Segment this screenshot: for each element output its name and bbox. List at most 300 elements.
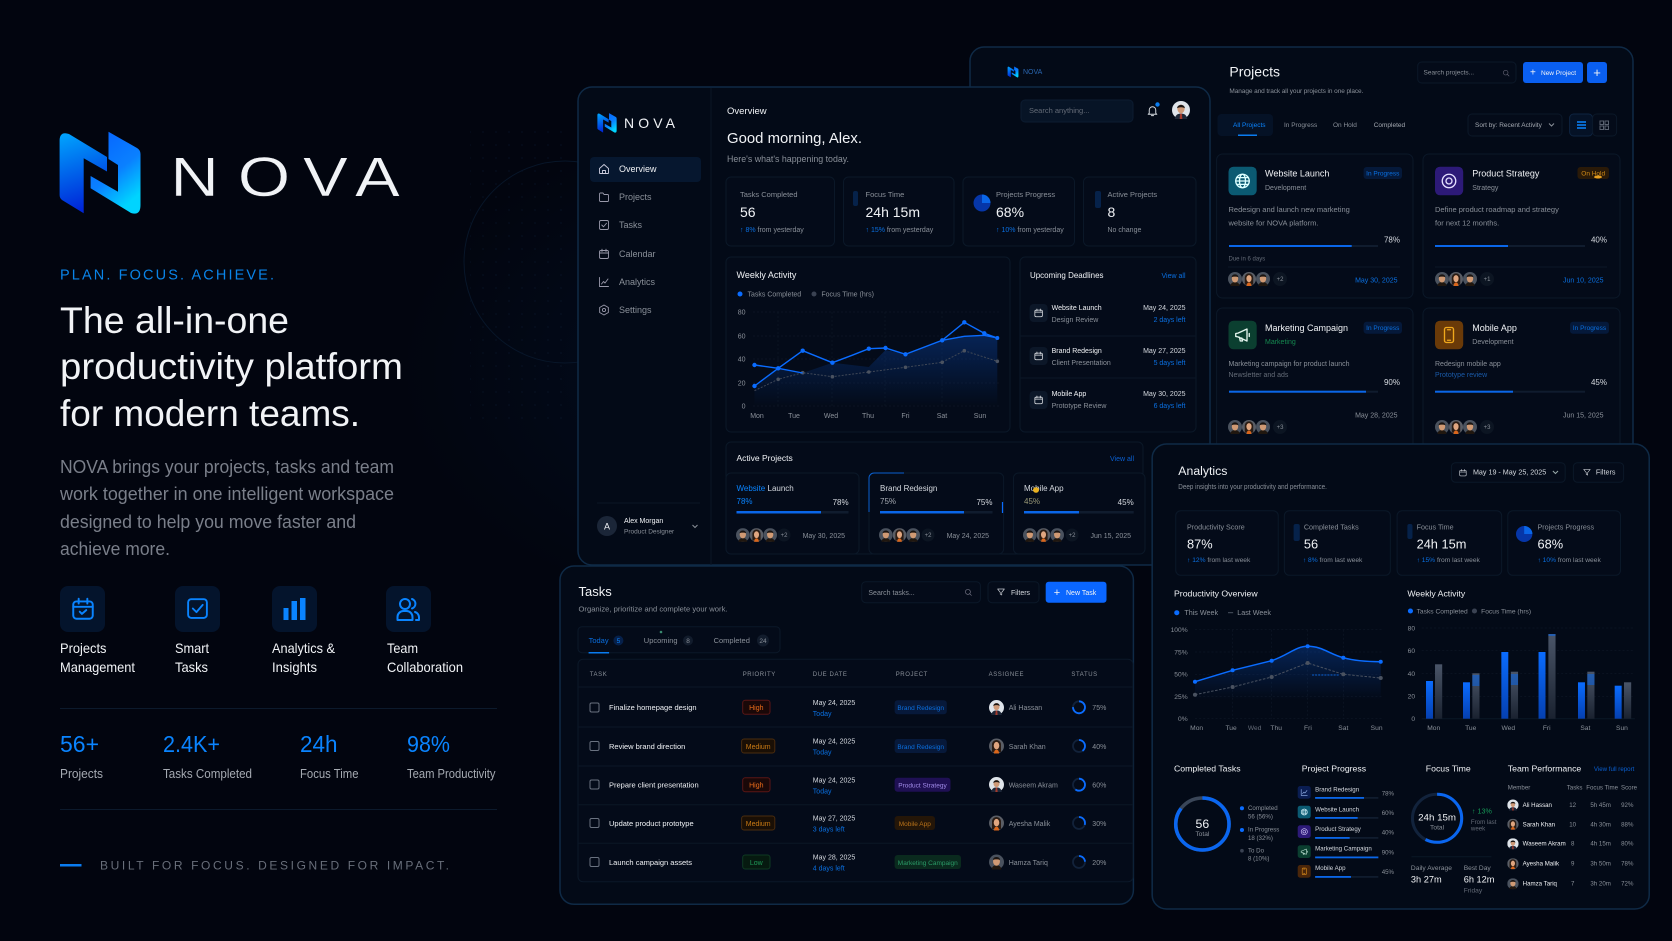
feature icons row [60, 586, 463, 675]
stat card: productivity score: ↑ 12% from last week [1187, 557, 1251, 564]
task row: update product prototype: Mobile App [899, 821, 931, 828]
member row: ali hassan: 5h 45m [1590, 803, 1611, 809]
member row: sarah khan: 4h 30m [1590, 822, 1611, 828]
table header: STATUS [1071, 672, 1098, 678]
navigation menu: Projects [619, 192, 652, 202]
chart: weekly activity line chart: 40 [738, 356, 746, 364]
panel: active projects [726, 442, 1145, 554]
panel: analytics window [1152, 444, 1649, 909]
project tabs: In Progress [1284, 122, 1318, 129]
stat card: focus time [844, 177, 954, 246]
member row: waseem akram [1507, 838, 1634, 849]
stat: team productivity [407, 731, 496, 781]
stat: team productivity: 98% [407, 731, 450, 757]
chart: productivity overview line chart: 75% [1174, 649, 1188, 656]
active project: website launch: May 30, 2025 [803, 533, 845, 540]
sidebar [590, 113, 701, 536]
task tabs: Today [589, 636, 609, 645]
chart: weekly activity line chart: 20 [738, 380, 746, 388]
panel: completed tasks donut: 56 (56%) [1248, 815, 1273, 821]
member row: hamza tariq: Hamza Tariq [1523, 882, 1557, 888]
deadline: website launch: May 24, 2025 [1143, 305, 1186, 312]
task row: review brand direction: 40% [1092, 744, 1106, 751]
stat card: productivity score: 87% [1187, 538, 1213, 552]
task row: launch campaign assets: 20% [1092, 860, 1106, 867]
analytics header: Analytics [1178, 464, 1227, 478]
feature: team collaboration [386, 586, 463, 675]
analytics header [1178, 464, 1327, 491]
project card: website launch: Website Launch [1265, 169, 1329, 179]
project card: marketing campaign: Marketing [1265, 339, 1296, 346]
headline: The all-in-one [60, 300, 289, 341]
panel: focus time ring: ↑ 13% [1472, 807, 1493, 815]
feature: analytics and insights: Analytics & [272, 640, 336, 656]
task row: review brand direction: Brand Redesign [897, 744, 944, 751]
deadline: website launch: 2 days left [1154, 317, 1186, 324]
chart: weekly activity bar chart [1407, 589, 1635, 732]
decorative background glow and dot grid [400, 120, 1160, 620]
task row: prepare client presentation [590, 777, 1106, 796]
member row: ayesha malik: 78% [1621, 862, 1634, 868]
stat: projects: Projects [60, 766, 103, 781]
user profile: A [604, 522, 610, 532]
member row: sarah khan: 10 [1569, 822, 1577, 828]
chart: weekly activity line chart: 60 [738, 334, 746, 340]
stat: focus time: 24h [300, 731, 338, 757]
user profile [597, 516, 698, 536]
panel: focus time ring: 3h 27m [1411, 875, 1442, 885]
task row: finalize homepage design: May 24, 2025 [813, 700, 855, 707]
project tabs: On Hold [1333, 122, 1357, 129]
active project: website launch: 78% [736, 497, 753, 506]
stat card: productivity score [1176, 511, 1278, 575]
project card: marketing campaign: 90% [1384, 378, 1400, 387]
stat card: projects progress: ↑ 10% from last week [1538, 557, 1602, 564]
panel: completed tasks donut: 18 (32%) [1248, 836, 1273, 842]
project card: marketing campaign: +3 [1277, 425, 1284, 431]
projects header: Projects [1229, 64, 1280, 80]
tasks toolbar [862, 582, 1106, 603]
project card: marketing campaign: Marketing campaign for product launch [1228, 361, 1350, 368]
mini logo [597, 113, 676, 133]
task tabs: Upcoming [644, 636, 678, 645]
feature: smart tasks: Smart [175, 640, 209, 656]
deadline: mobile app: 6 days left [1154, 403, 1186, 410]
overview header: Good morning, Alex. [727, 130, 862, 147]
chart: weekly activity bar chart: Tasks Completed [1417, 608, 1468, 615]
chart: weekly activity bar chart: 80 [1408, 625, 1415, 632]
task row: prepare client presentation: 60% [1092, 782, 1106, 790]
project card: mobile app: +3 [1484, 425, 1491, 431]
chart: weekly activity line chart: Thu [862, 413, 874, 420]
project card: product strategy: Define product roadmap and strategy [1435, 205, 1559, 214]
panel: focus time ring: week [1470, 827, 1486, 832]
chart: weekly activity line chart [726, 257, 1010, 432]
project card: product strategy: Jun 10, 2025 [1563, 278, 1604, 285]
chart: weekly activity line chart: Focus Time (hrs) [821, 292, 874, 298]
task row: finalize homepage design: High [749, 705, 764, 712]
task row: launch campaign assets: Marketing Campaign [898, 860, 958, 867]
progress row: brand redesign: Brand Redesign [1315, 788, 1359, 794]
stat card: focus time: 24h 15m [1417, 538, 1466, 552]
progress row: marketing campaign [1298, 845, 1395, 858]
chart: weekly activity bar chart: 20 [1408, 694, 1415, 701]
task row: prepare client presentation: High [749, 782, 764, 790]
panel: focus time ring: Best Day [1464, 865, 1491, 872]
task row: launch campaign assets [590, 854, 1106, 873]
panel: active projects: View all [1110, 456, 1134, 463]
chart: weekly activity line chart: Tasks Completed [748, 292, 801, 298]
member row: ayesha malik: Ayesha Malik [1523, 862, 1560, 868]
mini logo: NOVA [1023, 69, 1043, 76]
tasks table [578, 659, 1133, 882]
active project: brand redesign: 75% [976, 498, 992, 507]
project card: website launch: In Progress [1366, 170, 1400, 178]
active project: mobile app: 45% [1118, 498, 1134, 507]
stat card: active projects: 8 [1108, 204, 1116, 220]
user profile: Alex Morgan [624, 518, 663, 525]
chart: weekly activity bar chart: Weekly Activity [1407, 589, 1466, 599]
tasks header [578, 584, 728, 614]
chart: weekly activity line chart: 80 [738, 310, 746, 316]
progress row: marketing campaign: 90% [1382, 851, 1395, 856]
navigation menu: Analytics [619, 277, 656, 287]
project card: product strategy: On Hold [1581, 170, 1606, 178]
panel: completed tasks donut: 56 [1196, 817, 1209, 831]
headline [60, 300, 403, 434]
stat: tasks completed: Tasks Completed [163, 766, 252, 781]
chart: productivity overview line chart: This Week [1184, 609, 1219, 617]
progress row: website launch: Website Launch [1315, 808, 1359, 813]
project card: website launch: website for NOVA platform. [1228, 218, 1318, 227]
table header: TASK [590, 672, 607, 678]
deadline: brand redesign: May 27, 2025 [1143, 348, 1186, 355]
user profile: Product Designer [624, 529, 675, 536]
stat card: completed tasks [1284, 511, 1390, 575]
task row: prepare client presentation: Waseem Akram [1009, 782, 1058, 790]
overview header: Overview [727, 106, 767, 117]
project card: mobile app: Development [1472, 339, 1514, 346]
panel: focus time ring: From last [1471, 820, 1497, 826]
chart: productivity overview line chart: Fri [1304, 725, 1312, 732]
project card: product strategy: 40% [1591, 236, 1607, 245]
description paragraph: achieve more. [60, 539, 170, 559]
task row: launch campaign assets: 4 days left [813, 866, 845, 873]
projects header [1229, 64, 1364, 95]
chart: productivity overview line chart: Wed [1248, 725, 1262, 732]
feature: analytics and insights [272, 586, 336, 675]
deadline: brand redesign: Client Presentation [1052, 360, 1111, 367]
progress row: product strategy: 40% [1382, 831, 1395, 837]
project card: mobile app: Mobile App [1472, 323, 1517, 333]
active project: mobile app: 45% [1024, 497, 1040, 506]
stat: focus time [300, 731, 358, 781]
stat card: completed tasks: ↑ 8% from last week [1303, 557, 1363, 564]
progress row: marketing campaign: Marketing Campaign [1315, 847, 1372, 852]
deadline: mobile app: May 30, 2025 [1143, 391, 1186, 398]
project card: marketing campaign: May 28, 2025 [1355, 413, 1398, 420]
panel: completed tasks donut: Completed [1248, 806, 1278, 812]
chart: weekly activity bar chart: Tue [1465, 725, 1477, 732]
deadline: mobile app: Prototype Review [1052, 403, 1107, 410]
stat: focus time: Focus Time [300, 766, 358, 781]
tasks header: Organize, prioritize and complete your work. [578, 605, 728, 614]
left column: brand and intro [59, 132, 403, 559]
stat card: active projects: Active Projects [1108, 190, 1157, 199]
tasks toolbar: Filters [1011, 590, 1031, 597]
project card: marketing campaign: Newsletter and ads [1228, 372, 1289, 379]
stat card: projects progress [1508, 511, 1621, 575]
stat: projects: 56+ [60, 731, 99, 757]
panel: focus time ring: Daily Average [1411, 865, 1452, 872]
active project: website launch [726, 473, 859, 554]
task row: update product prototype: 30% [1092, 821, 1106, 828]
chart: productivity overview line chart: 100% [1171, 627, 1188, 634]
chart: weekly activity bar chart: Fri [1543, 725, 1551, 732]
feature: projects management [60, 586, 135, 675]
projects toolbar [1418, 62, 1607, 83]
member row: ali hassan: Ali Hassan [1523, 803, 1552, 809]
task row: finalize homepage design: 75% [1092, 705, 1106, 712]
project card: mobile app: Redesign mobile app [1435, 361, 1501, 368]
navigation menu [590, 157, 701, 315]
deadline: brand redesign [1030, 347, 1186, 367]
table header: ASSIGNEE [989, 672, 1024, 678]
task tabs: 5 [617, 638, 621, 645]
feature: team collaboration: Collaboration [387, 659, 463, 675]
stat card: focus time [1397, 511, 1502, 575]
progress row: mobile app: Mobile App [1315, 866, 1346, 872]
table header: PRIORITY [743, 672, 776, 678]
chart: weekly activity line chart: Wed [824, 413, 838, 420]
mini logo [1008, 66, 1043, 77]
stat card: active projects: No change [1108, 227, 1141, 234]
chart: weekly activity line chart: Weekly Activity [736, 270, 797, 280]
projects toolbar: + [1530, 68, 1536, 78]
stat card: projects progress: 68% [996, 204, 1024, 220]
feature: smart tasks: Tasks [175, 659, 208, 675]
stat card: projects progress: 68% [1538, 538, 1563, 552]
project card: marketing campaign [1217, 308, 1413, 458]
member row: ali hassan: 12 [1569, 803, 1577, 809]
active project: brand redesign: Brand Redesign [880, 484, 937, 493]
task row: review brand direction: Review brand direction [609, 742, 685, 751]
analytics header: Deep insights into your productivity and performance. [1178, 483, 1327, 491]
chart: productivity overview line chart: Last Week [1237, 609, 1271, 617]
task row: launch campaign assets: May 28, 2025 [813, 855, 855, 862]
task tabs: 8 [686, 638, 690, 645]
navigation menu: Tasks [619, 220, 643, 230]
table header: PROJECT [896, 672, 928, 678]
chart: productivity overview line chart: Sat [1338, 725, 1348, 732]
active project: mobile app [1014, 473, 1145, 554]
task row: prepare client presentation: Today [813, 788, 832, 796]
task row: prepare client presentation: Product Strategy [898, 782, 947, 790]
chart: weekly activity line chart: Sat [937, 413, 947, 420]
chart: productivity overview line chart: Tue [1225, 725, 1237, 732]
active project: website launch: Website Launch [736, 484, 794, 493]
deadline: website launch [1030, 304, 1186, 324]
panel: project progress: Project Progress [1302, 764, 1366, 774]
project card: mobile app: 45% [1591, 378, 1607, 387]
deadline: mobile app: Mobile App [1052, 391, 1086, 398]
panel: team performance table: View full report [1594, 767, 1635, 773]
project card: product strategy [1423, 154, 1620, 298]
panel: team performance table: Tasks [1567, 785, 1582, 791]
task row: update product prototype: 3 days left [813, 827, 845, 834]
navigation menu: Calendar [619, 249, 656, 259]
task row: launch campaign assets: Low [750, 860, 764, 867]
project card: mobile app: Jun 15, 2025 [1563, 413, 1604, 420]
chart: weekly activity line chart: 0 [742, 404, 746, 410]
tasks toolbar: + [1054, 587, 1060, 599]
stat card: focus time: ↑ 15% from yesterday [866, 227, 934, 234]
navigation menu: Settings [619, 305, 652, 315]
overview header: Search anything... [1029, 106, 1089, 115]
chart: weekly activity bar chart: 0 [1411, 716, 1415, 723]
panel: team performance table: Focus Time [1586, 785, 1619, 791]
chart: productivity overview line chart [1171, 589, 1383, 732]
feature: analytics and insights: Insights [272, 659, 317, 675]
task row: finalize homepage design: Brand Redesign [897, 705, 944, 712]
project tabs [1218, 114, 1617, 136]
stat: tasks completed: 2.4K+ [163, 731, 220, 757]
footer slogan: BUILT FOR FOCUS. DESIGNED FOR IMPACT. [100, 858, 449, 872]
navigation menu: Overview [619, 164, 657, 174]
project card: website launch: May 30, 2025 [1355, 278, 1398, 285]
panel: focus time ring: 6h 12m [1464, 875, 1494, 885]
panel: upcoming deadlines [1020, 257, 1196, 432]
tasks header: Tasks [578, 584, 612, 599]
stat card: productivity score: Productivity Score [1187, 523, 1245, 531]
member row: hamza tariq: 3h 20m [1590, 882, 1611, 888]
stat: projects [60, 731, 103, 781]
member row: sarah khan: 88% [1621, 822, 1634, 828]
projects toolbar: + [1593, 65, 1601, 80]
chart: productivity overview line chart: Sun [1371, 725, 1383, 732]
progress row: website launch [1298, 806, 1395, 819]
panel: tasks window [560, 566, 1133, 904]
member row: hamza tariq: 7 [1571, 882, 1575, 888]
project card: website launch: Redesign and launch new marketing [1228, 205, 1350, 214]
projects header: Manage and track all your projects in one place. [1229, 88, 1364, 95]
panel: overview window [578, 87, 1210, 565]
description paragraph: NOVA brings your projects, tasks and team [60, 457, 394, 477]
panel: team performance table: Team Performance [1508, 764, 1581, 774]
project card: website launch: Due in 6 days [1228, 257, 1265, 263]
panel: focus time ring [1411, 764, 1497, 894]
mini logo: NOVA [624, 115, 676, 131]
chart: weekly activity line chart: Mon [750, 413, 764, 420]
table header: DUE DATE [813, 672, 848, 678]
task row: update product prototype: Update product prototype [609, 819, 694, 828]
project card: mobile app [1423, 308, 1620, 458]
task row: review brand direction [590, 738, 1106, 757]
analytics toolbar: May 19 - May 25, 2025 [1473, 469, 1546, 477]
task row: finalize homepage design [590, 700, 1106, 718]
panel: focus time ring: 24h 15m [1418, 813, 1456, 823]
feature: smart tasks [175, 586, 220, 675]
brand wordmark: NOVA [170, 146, 401, 209]
active project: brand redesign: May 24, 2025 [947, 533, 989, 540]
stat card: projects progress: Projects Progress [996, 190, 1055, 199]
stat card: tasks completed: 56 [740, 204, 756, 220]
member row: ali hassan: 92% [1621, 803, 1634, 809]
stat card: focus time: Focus Time [1417, 523, 1454, 531]
panel: focus time ring: Friday [1464, 887, 1483, 894]
chart: productivity overview line chart: Thu [1270, 725, 1282, 732]
deadline: website launch: Design Review [1052, 317, 1099, 324]
key statistics [60, 731, 496, 781]
member row: hamza tariq [1507, 878, 1634, 889]
project tabs: Completed [1374, 122, 1406, 129]
stat card: tasks completed [726, 177, 834, 246]
active project: brand redesign: 75% [880, 497, 896, 506]
task row: prepare client presentation: Prepare client presentation [609, 780, 699, 790]
chart: weekly activity bar chart: Focus Time (hrs) [1481, 608, 1531, 615]
project card: product strategy: Product Strategy [1472, 169, 1540, 179]
project card: website launch [1217, 154, 1413, 298]
panel: completed tasks donut [1174, 764, 1279, 862]
deadline: website launch: Website Launch [1052, 305, 1102, 312]
active project: mobile app: Mobile App [1024, 484, 1064, 493]
panel: completed tasks donut: In Progress [1248, 828, 1279, 833]
chart: weekly activity bar chart: Mon [1427, 725, 1441, 732]
feature: team collaboration: Team [387, 640, 418, 656]
task row: update product prototype: May 27, 2025 [813, 816, 855, 823]
progress row: brand redesign [1298, 786, 1395, 799]
task row: update product prototype [590, 816, 1106, 834]
project card: mobile app: Prototype review [1435, 372, 1488, 379]
panel: focus time ring: Focus Time [1426, 764, 1471, 774]
chart: weekly activity bar chart: 60 [1408, 648, 1415, 655]
project card: mobile app: In Progress [1573, 325, 1607, 332]
deadline: brand redesign: 5 days left [1154, 360, 1186, 367]
stat card: projects progress: ↑ 10% from yesterday [996, 227, 1064, 234]
task tabs: 24 [759, 638, 767, 645]
panel: project progress [1298, 764, 1395, 878]
task row: review brand direction: May 24, 2025 [813, 739, 855, 746]
progress row: brand redesign: 78% [1382, 791, 1395, 797]
member row: sarah khan: Sarah Khan [1523, 822, 1555, 828]
stat card: focus time: 24h 15m [866, 204, 920, 220]
member row: waseem akram: 4h 15m [1590, 842, 1611, 848]
task row: update product prototype: Ayesha Malik [1009, 821, 1051, 828]
project card: marketing campaign: Marketing Campaign [1265, 323, 1348, 333]
active project: website launch: 78% [833, 498, 849, 507]
headline: productivity platform [60, 346, 403, 387]
project tabs: Sort by: Recent Activity [1475, 122, 1543, 129]
task row: review brand direction: Medium [746, 744, 771, 751]
panel: completed tasks donut: 8 (10%) [1248, 857, 1269, 862]
panel: active projects: Active Projects [736, 453, 793, 463]
chart: weekly activity line chart: Sun [974, 413, 986, 420]
stat card: active projects [1084, 177, 1196, 246]
progress row: website launch: 60% [1382, 811, 1395, 817]
task row: prepare client presentation: May 24, 2025 [813, 778, 855, 784]
analytics toolbar [1451, 463, 1624, 482]
panel: team performance table [1507, 764, 1638, 889]
member row: waseem akram: Waseem Akram [1523, 842, 1566, 848]
stat card: focus time: Focus Time [866, 190, 904, 199]
task row: review brand direction: Sarah Khan [1009, 744, 1046, 751]
chart: weekly activity bar chart: Sun [1616, 725, 1628, 732]
project tabs: All Projects [1233, 122, 1266, 129]
icon: NOVA logo mark [60, 132, 140, 214]
project card: website launch: 78% [1384, 236, 1400, 245]
task row: launch campaign assets: Hamza Tariq [1009, 860, 1048, 867]
project card: website launch: +2 [1277, 277, 1284, 283]
